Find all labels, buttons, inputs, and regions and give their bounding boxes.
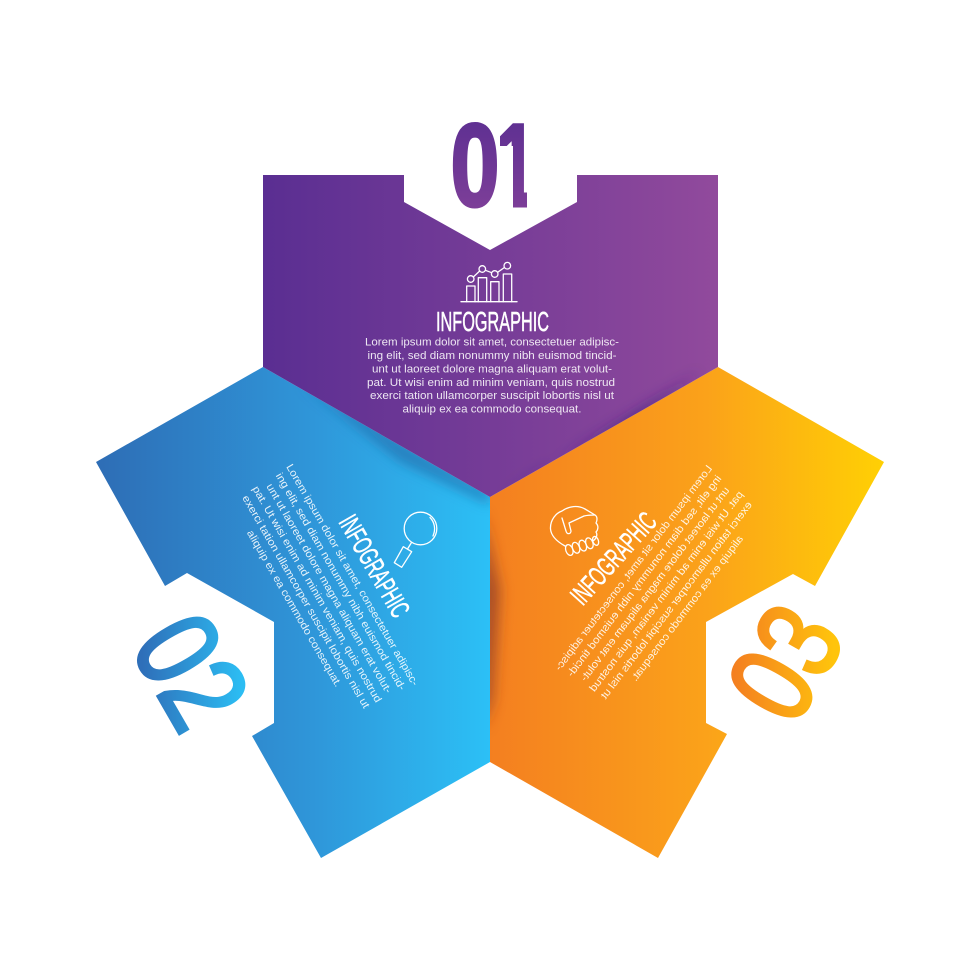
text block: panel 2	[225, 462, 421, 722]
text block: panel 1: ing elit, sed diam nonummy nibh euismod tincid-	[368, 350, 617, 362]
icon: magnifying glass	[394, 512, 437, 567]
number 01: 0	[450, 100, 500, 232]
heading: panel 3: INFOGRAPHIC	[564, 506, 663, 611]
panel 1: purple arrow	[263, 175, 718, 497]
text block: panel 2: Lorem ipsum dolor sit amet, consectetuer adipisc-	[283, 462, 421, 689]
text block: panel 3 (mirrored): aliquip ex ea commodo consequat.	[629, 533, 746, 684]
number 01: 1	[495, 100, 537, 232]
text block: panel 2: pat. Ut wisi enim ad minim veniam, quis nostrud	[249, 484, 384, 705]
text block: panel 1: Lorem ipsum dolor sit amet, consectetuer adipisc-	[365, 336, 619, 348]
text block: panel 3 (mirrored)	[552, 463, 769, 714]
text block: panel 3 (mirrored): pat. Ut wisi enim ad minim veniam, quis nostrud	[587, 489, 746, 694]
text block: panel 2: exerci tation ullamcorper suscipit lobortis nisl ut	[239, 493, 372, 711]
panel 2: blue arrow	[96, 367, 490, 858]
text block: panel 3 (mirrored): Lorem ipsum dolor sit amet, consectetuer adipisc-	[552, 463, 715, 674]
text block: panel 2: unt ut laoreet dolore magna aliquam erat volut-	[264, 482, 394, 696]
text block: panel 1	[365, 336, 619, 416]
text block: panel 2: ing elit, sed diam nonummy nibh euismod tincid-	[273, 471, 408, 693]
text block: panel 1: pat. Ut wisi enim ad minim veniam, quis nostrud	[367, 377, 615, 389]
text block: panel 3 (mirrored): unt ut laoreet dolore magna aliquam erat volut-	[578, 485, 732, 684]
text block: panel 3 (mirrored): ing elit, sed diam nonummy nibh euismod tincid-	[565, 473, 724, 680]
icon: handshake	[550, 507, 600, 556]
text block: panel 1: unt ut laoreet dolore magna aliquam erat volut-	[372, 363, 613, 375]
text block: panel 1: aliquip ex ea commodo consequat.	[402, 404, 582, 416]
heading: panel 2: INFOGRAPHIC	[333, 509, 416, 623]
panel 3: orange arrow	[482, 367, 884, 858]
text block: panel 3 (mirrored): exerci tation ullamcorper suscipit lobortis nisl ut	[598, 499, 755, 702]
number 03: 03	[702, 584, 869, 742]
number 01	[452, 122, 527, 208]
text block: panel 2: aliquip ex ea commodo consequat.	[244, 528, 344, 689]
text block: panel 1: exerci tation ullamcorper suscipit lobortis nisl ut	[370, 390, 614, 402]
number 02: 02	[107, 593, 274, 751]
heading: panel 1: INFOGRAPHIC	[436, 306, 549, 337]
icon: bar chart with trend line	[461, 262, 517, 302]
